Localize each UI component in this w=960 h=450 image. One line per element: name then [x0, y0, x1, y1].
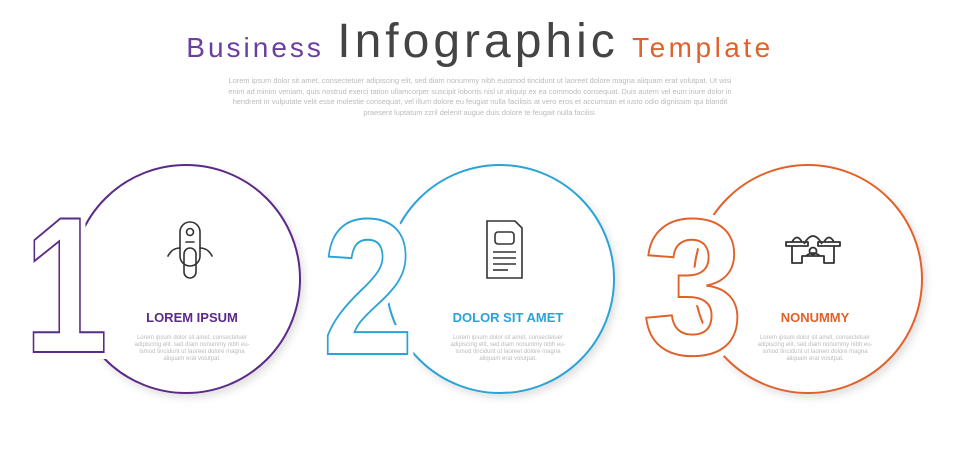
- text block 1: [134, 335, 250, 362]
- text block 3: adipiscing elit, sed diam nonummy nibh eu-: [757, 342, 873, 348]
- heading: nonummy: NONUMMY: [781, 310, 850, 325]
- number 1: 1: [24, 177, 108, 394]
- number 1: 1: [24, 177, 108, 394]
- step 1: [24, 165, 300, 394]
- text block 3: Lorem ipsum dolor sit amet, consectetuer: [760, 335, 870, 341]
- text block 3: ismod tincidunt ut laoreet dolore magna: [762, 349, 868, 355]
- intro paragraph: Lorem ipsum dolor sit amet, consectetuer adipiscing elit, sed diam nonummy nibh euismod tincidunt ut laoreet dolore magna aliquam erat volutpat. Ut wisi enim ad minim veniam, quis nostrud exerci tation ullamcorper suscipit lobortis nisl ut aliquip ex ea commodo consequat. Duis autem vel eum iriure dolor in hendrerit in vulputate velit esse molestie consequat, vel illum dolore eu feugiat nulla facilisis at vero eros et accumsan et iusto odio dignissim qui blandit praesent luptatum zzril delenit augue duis dolore te feugait nulla facilisi.: [228, 76, 732, 117]
- text block 1: adipiscing elit, sed diam nonummy nibh eu-: [134, 342, 250, 348]
- number 2: 2: [322, 179, 414, 396]
- number 3: 3: [642, 179, 744, 396]
- text block 2: Lorem ipsum dolor sit amet, consectetuer: [453, 335, 563, 341]
- icon: robot: [168, 222, 212, 278]
- number 3: 3: [642, 179, 744, 396]
- number 2: 2: [322, 179, 414, 396]
- text block 2: aliquam erat volutpat.: [479, 356, 537, 362]
- text block 1: Lorem ipsum dolor sit amet, consectetuer: [137, 335, 247, 341]
- icon: document: [487, 221, 522, 278]
- text block 3: [757, 335, 873, 362]
- step 2: [322, 165, 614, 396]
- text block 2: adipiscing elit, sed diam nonummy nibh eu-: [450, 342, 566, 348]
- text block 2: ismod tincidunt ut laoreet dolore magna: [455, 349, 561, 355]
- heading: lorem ipsum: LOREM IPSUM: [146, 310, 238, 325]
- text block 3: aliquam erat volutpat.: [786, 356, 844, 362]
- text block 2: [450, 335, 566, 362]
- icon: drone: [786, 236, 840, 263]
- title: Business Infographic Template: [186, 15, 774, 68]
- text block 1: aliquam erat volutpat.: [163, 356, 221, 362]
- text block 1: ismod tincidunt ut laoreet dolore magna: [139, 349, 245, 355]
- step 3: [642, 165, 922, 396]
- heading: dolor sit amet: DOLOR SIT AMET: [453, 310, 563, 325]
